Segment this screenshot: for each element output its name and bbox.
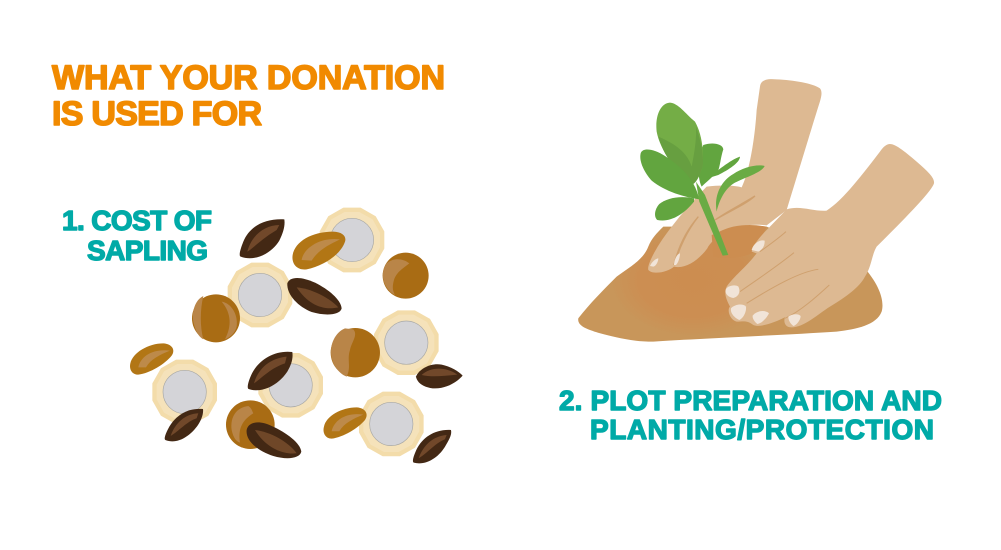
- coin: [360, 393, 423, 455]
- round seed: [383, 253, 429, 299]
- stem: [696, 182, 728, 256]
- leaf: right back: [699, 143, 723, 187]
- title: [52, 59, 445, 133]
- brown seed: [130, 343, 173, 375]
- dark seed: [413, 430, 451, 463]
- soil between fingers: [712, 225, 767, 258]
- dark seed: [240, 219, 285, 258]
- front hand: [725, 144, 934, 327]
- round seed: [331, 328, 380, 377]
- leaf: top: [656, 103, 703, 185]
- coin: [229, 264, 291, 326]
- front hand creases: [740, 232, 829, 318]
- heading: plot preparation and planting/protection: [559, 385, 942, 445]
- round seed: [226, 400, 275, 449]
- coin: [259, 354, 322, 417]
- small leaf: [707, 157, 740, 178]
- title: IS USED FOR: [52, 95, 262, 133]
- dark seed: [248, 352, 293, 390]
- heading: cost of sapling: [62, 205, 212, 266]
- darker soil patch: [617, 235, 744, 316]
- back hand crease: [674, 196, 755, 265]
- coin: [321, 209, 383, 271]
- illustration: coins and seeds: [130, 209, 463, 463]
- dark seed: [416, 364, 463, 388]
- thin leaf: [716, 165, 765, 212]
- leaf: lower left: [655, 197, 694, 221]
- heading: cost of sapling: SAPLING: [87, 235, 208, 266]
- dark seed: [287, 278, 342, 314]
- title: WHAT YOUR DONATION: [52, 59, 445, 97]
- coin: [153, 361, 216, 423]
- brown seed: [292, 232, 345, 269]
- soil mound: [578, 227, 882, 342]
- brown seed: [324, 407, 367, 439]
- back hand: [648, 79, 822, 273]
- coin: [375, 311, 438, 374]
- round seed: [192, 294, 240, 342]
- seedling: [640, 103, 765, 256]
- heading: cost of sapling: 1. COST OF: [62, 205, 212, 236]
- heading: plot preparation and planting/protection: PLANTING/PROTECTION: [590, 414, 934, 445]
- dark seed: [165, 409, 203, 441]
- leaf: left: [640, 150, 699, 199]
- dark seed: [247, 422, 301, 458]
- leaf shade: [658, 127, 703, 185]
- illustration: hands planting a seedling: [578, 79, 934, 342]
- heading: plot preparation and planting/protection: 2. PLOT PREPARATION AND: [559, 385, 942, 416]
- fingernails: [650, 240, 801, 326]
